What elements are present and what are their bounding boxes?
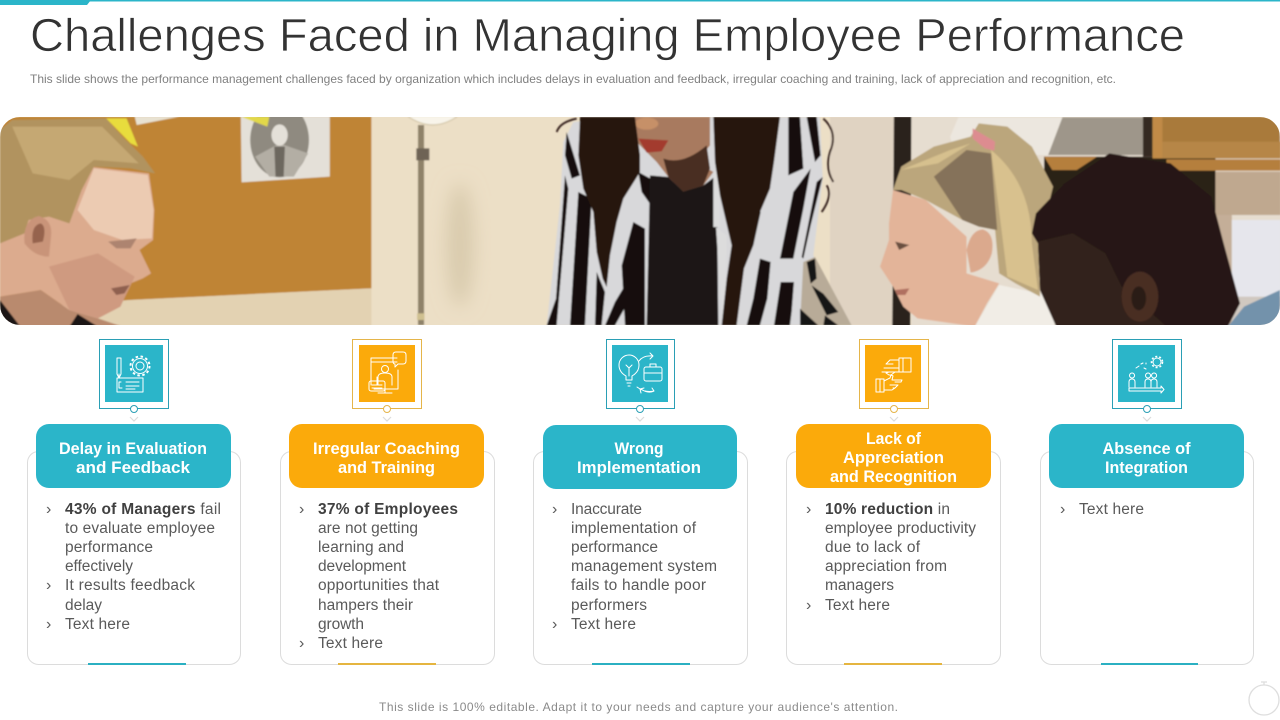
card 4 text bbox=[806, 501, 976, 614]
card 3 text: performers bbox=[571, 597, 647, 614]
card 4 icon frame bbox=[860, 340, 928, 408]
card 4 text: › bbox=[806, 501, 811, 518]
card 2 header bbox=[289, 424, 484, 488]
sub: cork board and poster bbox=[0, 103, 457, 327]
card 2 frame bbox=[280, 452, 494, 664]
card 1 text: performance bbox=[65, 539, 153, 556]
card 1 header: Delay in Evaluation bbox=[59, 440, 207, 458]
card 1 text: It results feedback bbox=[65, 577, 195, 594]
card 1 frame bbox=[28, 452, 240, 664]
card 4 text: due to lack of bbox=[825, 539, 921, 556]
card 4 text: › bbox=[806, 597, 811, 614]
card 5 icon frame bbox=[1112, 340, 1182, 408]
card 1 text: effectively bbox=[65, 558, 133, 575]
card 2 icon: online coaching bbox=[359, 345, 415, 402]
card 2 header: and Training bbox=[338, 459, 435, 477]
card 4: lack of appreciation and recognition bbox=[786, 340, 1000, 665]
card 1 text: Text here bbox=[65, 616, 130, 633]
card 2 connector bbox=[383, 406, 391, 421]
card 1 header bbox=[36, 424, 231, 488]
card 1: delay in evaluation and feedback bbox=[28, 340, 240, 665]
card 2 text: hampers their bbox=[318, 597, 413, 614]
card 1 text: delay bbox=[65, 597, 102, 614]
card 1 text: › bbox=[46, 501, 51, 518]
card 3 frame bbox=[534, 452, 748, 664]
card 2 text: › bbox=[299, 635, 304, 652]
footer note: This slide is 100% editable. Adapt it to your needs and capture your audience's attention. bbox=[379, 700, 898, 714]
card 3 text: Inaccurate bbox=[571, 501, 642, 518]
sub: man on left bbox=[0, 118, 155, 327]
card 2 text: learning and bbox=[318, 539, 404, 556]
card 3: wrong implementation bbox=[534, 340, 748, 665]
card 3 text: fails to handle poor bbox=[571, 577, 706, 594]
card 4 header: Appreciation bbox=[843, 449, 944, 467]
card 5 header: Integration bbox=[1105, 459, 1188, 477]
card 4 icon: hands bbox=[865, 345, 921, 402]
card 1 connector bbox=[130, 406, 138, 421]
card 3 text: Text here bbox=[571, 616, 636, 633]
card 3 header: Wrong bbox=[614, 440, 664, 458]
photo: team meeting bbox=[0, 103, 1280, 327]
sub: blonde woman bbox=[880, 123, 1054, 327]
card 2 text: 37% of Employees bbox=[318, 501, 458, 518]
card 3 text bbox=[552, 501, 717, 633]
card 2 text: development bbox=[318, 558, 407, 575]
card 3 text: management system bbox=[571, 558, 717, 575]
card 2 text: growth bbox=[318, 616, 364, 633]
card 3 header: Implementation bbox=[577, 459, 701, 477]
card 2: irregular coaching and training bbox=[280, 340, 494, 665]
card 3 accent bbox=[592, 663, 690, 665]
card 3 text: › bbox=[552, 616, 557, 633]
card 2 text: › bbox=[299, 501, 304, 518]
card 4 accent bbox=[844, 663, 942, 665]
card 5 text: › bbox=[1060, 501, 1065, 518]
card 4 header: and Recognition bbox=[830, 468, 957, 486]
sub: shelves and books bbox=[892, 117, 1280, 327]
card 3 header bbox=[543, 425, 737, 489]
card 4 text: employee productivity bbox=[825, 520, 976, 537]
card 5 header: Absence of bbox=[1102, 440, 1191, 458]
card 5 text: Text here bbox=[1079, 501, 1144, 518]
card 2 icon frame bbox=[352, 340, 422, 408]
card 1 text: 43% of Managers fail bbox=[65, 501, 221, 518]
card 3 text: › bbox=[552, 501, 557, 518]
card 1 header: and Feedback bbox=[76, 459, 191, 477]
card 1 accent bbox=[88, 663, 186, 665]
card 1 icon frame bbox=[100, 340, 168, 408]
top accent bar bbox=[0, 0, 1280, 5]
sub: woman in striped jacket bbox=[547, 117, 852, 325]
card 4 frame bbox=[786, 452, 1000, 664]
card 3 connector bbox=[636, 406, 644, 421]
card 4 text: Text here bbox=[825, 597, 890, 614]
card 4 header bbox=[796, 424, 991, 488]
card 1 text: › bbox=[46, 616, 51, 633]
card 2 accent bbox=[338, 663, 436, 665]
card 5: absence of integration bbox=[1040, 340, 1254, 665]
sub: man in foreground bbox=[1032, 153, 1280, 327]
card 4 text: managers bbox=[825, 577, 894, 594]
card 2 text: opportunities that bbox=[318, 577, 440, 594]
card 2 text bbox=[299, 501, 458, 652]
card 1 icon: checklist and gear bbox=[105, 345, 163, 402]
card 4 connector bbox=[890, 406, 898, 421]
card 3 text: implementation of bbox=[571, 520, 697, 537]
card 2 text: Text here bbox=[318, 635, 383, 652]
card 5 accent bbox=[1101, 663, 1198, 665]
card 3 icon: bulb and briefcase bbox=[612, 345, 668, 402]
card 2 header: Irregular Coaching bbox=[313, 440, 460, 458]
card 1 text: › bbox=[46, 577, 51, 594]
card 4 text: 10% reduction in bbox=[825, 501, 950, 518]
card 1 text: to evaluate employee bbox=[65, 520, 215, 537]
card 5 connector bbox=[1143, 406, 1151, 421]
card 2 text: are not getting bbox=[318, 520, 418, 537]
card 3 text: performance bbox=[571, 539, 658, 556]
card 5 header bbox=[1049, 424, 1244, 488]
card 1 text bbox=[46, 501, 221, 633]
card 5 frame bbox=[1040, 452, 1254, 664]
card 4 header: Lack of bbox=[866, 430, 921, 448]
subtitle: This slide shows the performance management challenges faced by organization which includes delays in evaluation and feedback, irregular coaching and training, lack of appreciation and recognition, etc. bbox=[30, 72, 1116, 86]
card 4 text: appreciation from bbox=[825, 558, 947, 575]
card 5 icon: team and gear bbox=[1118, 345, 1175, 402]
card 3 icon frame bbox=[606, 340, 674, 408]
icon: stopwatch outline bbox=[1249, 682, 1279, 715]
title: Challenges Faced in Managing Employee Performance bbox=[30, 9, 1185, 61]
